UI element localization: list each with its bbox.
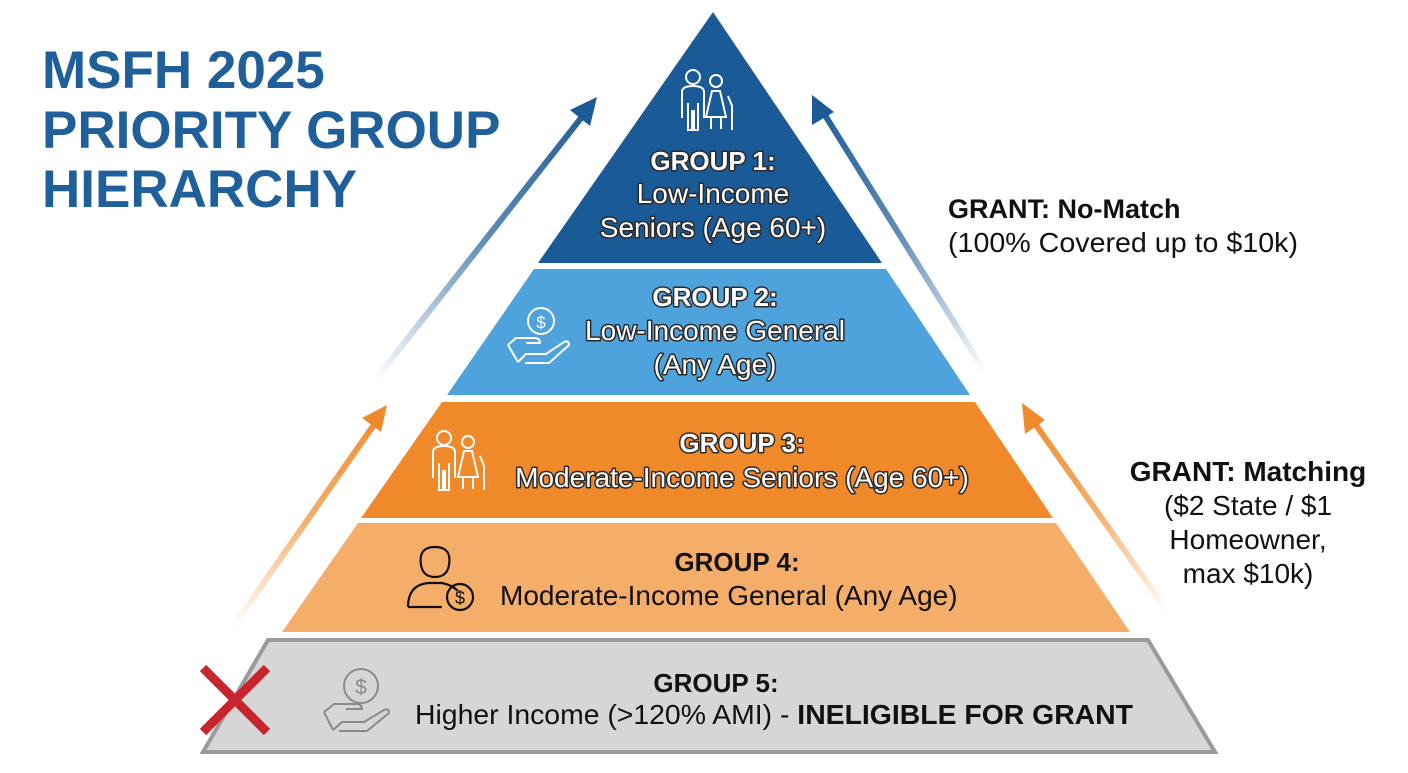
callout: matching grant: ($2 State / $1 — [1164, 490, 1332, 521]
icon: seniors — [682, 70, 732, 130]
arrow: right blue — [812, 95, 985, 372]
icon: hand with coin (gray) — [324, 669, 389, 731]
arrow: left blue — [375, 97, 597, 380]
callout: no-match grant: GRANT: No-Match — [948, 194, 1180, 224]
callout: matching grant — [1130, 456, 1366, 589]
tier: group 3: Moderate-Income Seniors (Age 60+) — [515, 462, 969, 493]
tier: group 1: Seniors (Age 60+) — [600, 212, 826, 243]
icon: hand with coin (gray): $ — [355, 676, 367, 699]
title: HIERARCHY — [42, 160, 357, 219]
tier: group 1: GROUP 1: — [650, 146, 776, 176]
arrow: right orange — [1022, 403, 1168, 612]
tier: group 4: Moderate-Income General (Any Age) — [500, 580, 958, 611]
tier: group 5 — [203, 640, 1215, 752]
icon: hand with coin: $ — [536, 313, 546, 332]
title: MSFH 2025 — [42, 41, 325, 100]
icon: person with coin — [408, 547, 473, 610]
tier: group 4: GROUP 4: — [674, 547, 800, 577]
tier: group 1 — [538, 12, 882, 263]
title — [42, 41, 500, 219]
tier: group 4 — [282, 523, 1130, 632]
tier: group 2: GROUP 2: — [652, 282, 778, 312]
tier: group 3 — [361, 402, 1053, 518]
arrow: left orange — [232, 405, 387, 628]
callout: no-match grant: (100% Covered up to $10k) — [948, 227, 1298, 258]
callout: matching grant: GRANT: Matching — [1130, 456, 1366, 487]
icon: seniors — [433, 431, 484, 490]
tier: group 5: GROUP 5: — [653, 668, 779, 698]
title: PRIORITY GROUP — [42, 101, 500, 160]
callout: matching grant: Homeowner, — [1169, 524, 1327, 555]
tier: group 5: Higher Income (>120% AMI) - INELIGIBLE FOR GRANT — [415, 699, 1133, 730]
tier: group 1: Low-Income — [637, 178, 789, 209]
callout: no-match grant — [948, 194, 1298, 258]
icon: hand with coin — [508, 308, 569, 363]
callout: matching grant: max $10k) — [1183, 558, 1313, 589]
tier: group 3: GROUP 3: — [679, 428, 805, 458]
icon: red X — [203, 668, 267, 732]
tier: group 2: (Any Age) — [654, 349, 776, 380]
tier: group 2 — [447, 269, 970, 395]
tier: group 2: Low-Income General — [585, 315, 845, 346]
icon: person with coin: $ — [455, 588, 465, 608]
